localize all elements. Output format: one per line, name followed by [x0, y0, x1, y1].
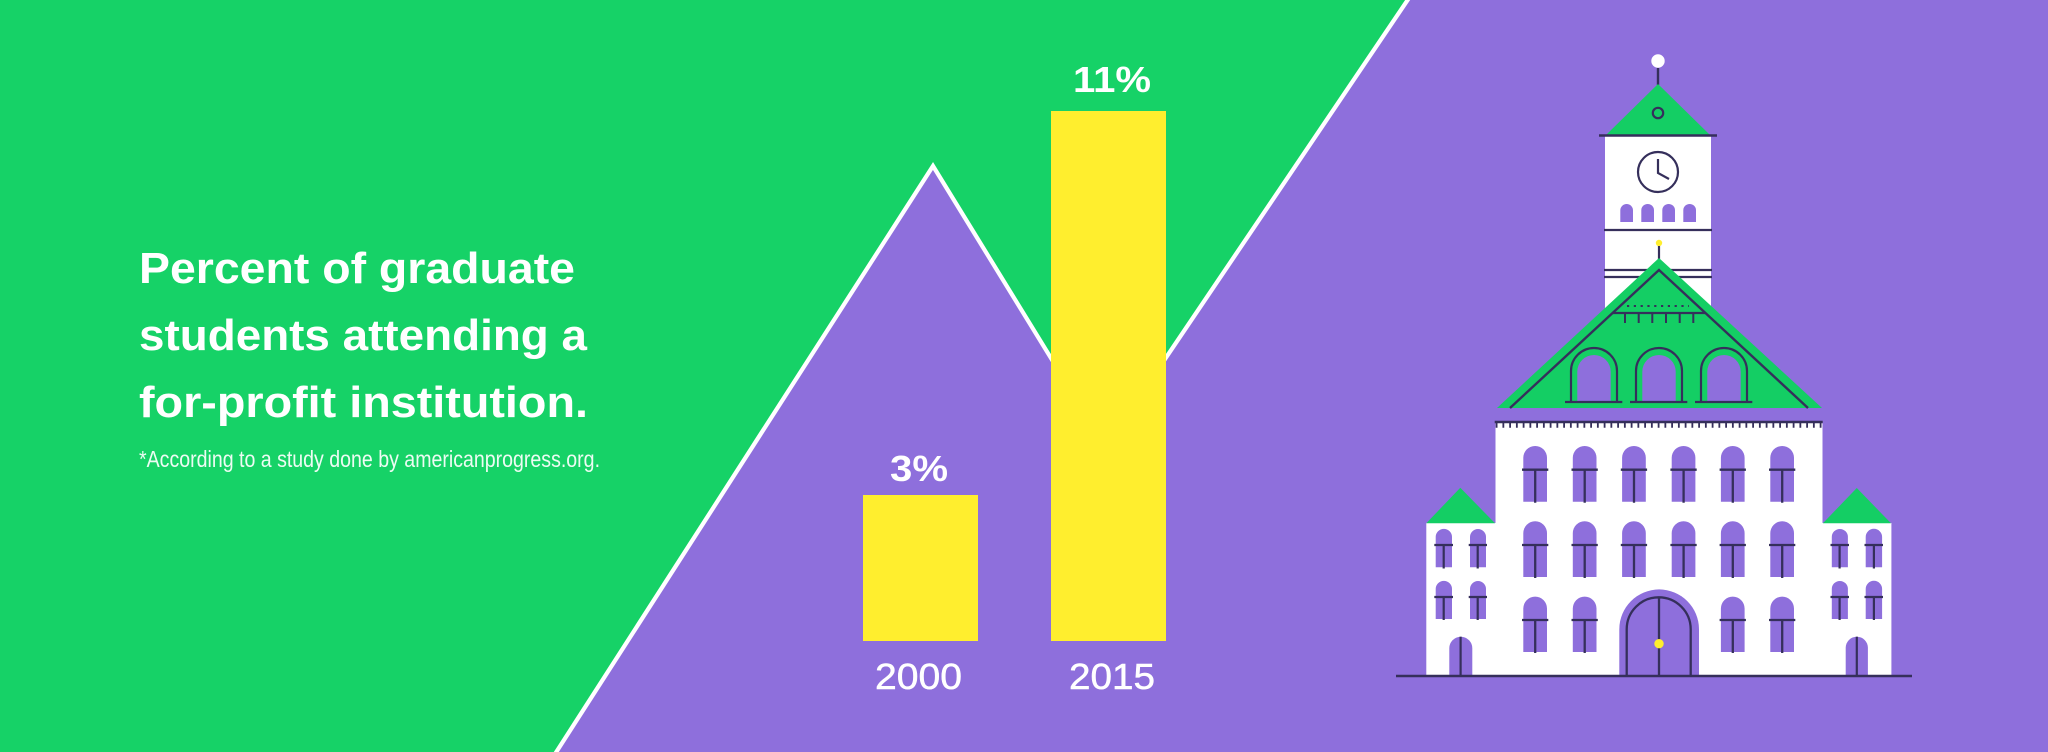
value: 11%: 11% — [1073, 59, 1151, 100]
bar: 2015 — [1051, 111, 1166, 641]
bar chart — [863, 59, 1166, 697]
main hall — [1495, 422, 1823, 676]
background: purple mountain shape — [555, 0, 2048, 752]
ground line — [1396, 675, 1912, 677]
heading: students attending a — [139, 311, 588, 360]
heading — [139, 244, 588, 427]
label: 2000: 2000 — [875, 656, 962, 697]
label: 2015: 2015 — [1069, 656, 1155, 697]
roof arch windows — [1565, 348, 1752, 402]
left wing — [1426, 488, 1496, 676]
clock tower — [1599, 54, 1717, 325]
source note: *According to a study done by americanprogress.org. — [139, 446, 600, 472]
tower windows — [1620, 204, 1696, 222]
cornice — [1495, 422, 1823, 428]
illustration: university building — [1396, 54, 1912, 676]
main windows — [1523, 446, 1794, 652]
main roof — [1497, 240, 1822, 408]
bar: 2000 — [863, 495, 978, 641]
right wing — [1822, 488, 1891, 676]
value: 3%: 3% — [890, 448, 948, 489]
icon: clock — [1638, 152, 1678, 192]
heading: for-profit institution. — [139, 378, 588, 427]
main door — [1619, 589, 1699, 676]
heading: Percent of graduate — [139, 244, 575, 293]
